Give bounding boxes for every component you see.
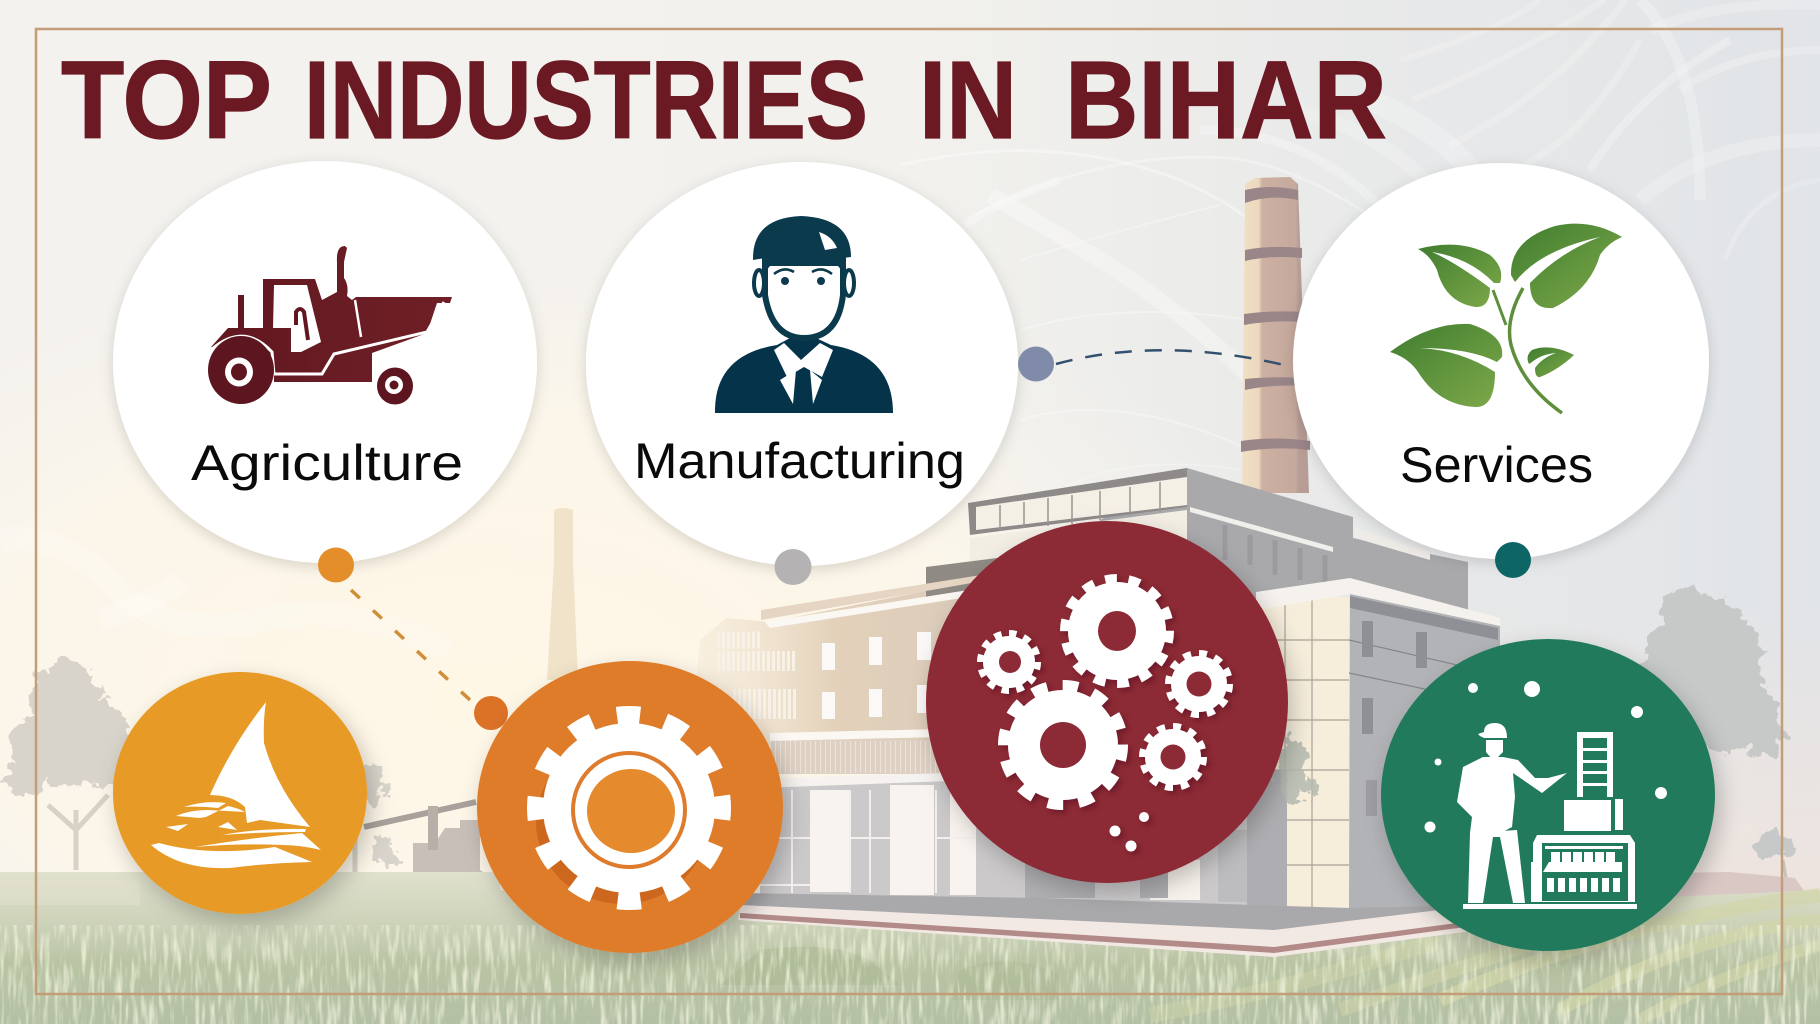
dot: orange node [474, 696, 508, 730]
icon: large gear [537, 716, 721, 900]
building: upper gray block [1100, 468, 1468, 620]
dot: manufacturing [774, 549, 812, 585]
building: balcony [770, 729, 945, 787]
title: IN [919, 39, 1017, 162]
icon: gear cluster [981, 579, 1229, 852]
label: services: Services [1400, 437, 1593, 493]
title [61, 39, 1387, 162]
panel: agriculture [113, 161, 537, 563]
panel: manufacturing [586, 162, 1018, 566]
icon: engineer with machine [1424, 681, 1667, 909]
dot: services teal [1495, 542, 1531, 578]
background: main factory chimney [1241, 177, 1310, 493]
panel: boat circle [113, 672, 367, 914]
building: left tan wing [690, 545, 1100, 745]
background: distant trees and small factory [0, 589, 1805, 900]
panel: worker and machine circle [1381, 639, 1715, 951]
label: manufacturing: Manufacturing [634, 433, 965, 489]
icon: sailboat [151, 702, 321, 868]
label: agriculture: Agriculture [191, 435, 463, 491]
background: grass field [0, 872, 1820, 1024]
building: base steps [738, 893, 1500, 957]
icon: green leaves [1390, 224, 1622, 413]
title: TOP [61, 39, 272, 162]
building: tree in front [1277, 738, 1320, 802]
dot: agriculture [318, 548, 354, 582]
gear holes [999, 611, 1212, 770]
icon: worker [715, 216, 893, 413]
panel: services [1293, 163, 1709, 559]
panel: cluster gears circle [926, 521, 1288, 883]
background: swirling lines [0, 0, 1820, 650]
panel: single gear circle [477, 661, 783, 953]
building: ground floor [760, 770, 1250, 905]
connector: manufacturing to services dashed line [1056, 350, 1284, 365]
background: far chimney [547, 508, 578, 680]
background: factory building [690, 468, 1500, 957]
dot: blue connector [1018, 346, 1054, 382]
title: INDUSTRIES [304, 39, 868, 162]
connector: agriculture dashed line [351, 590, 470, 700]
title: BIHAR [1065, 39, 1387, 162]
icon: tractor [208, 246, 452, 404]
building: side and cream facade [1247, 578, 1500, 925]
building: penthouse window band [968, 468, 1430, 570]
